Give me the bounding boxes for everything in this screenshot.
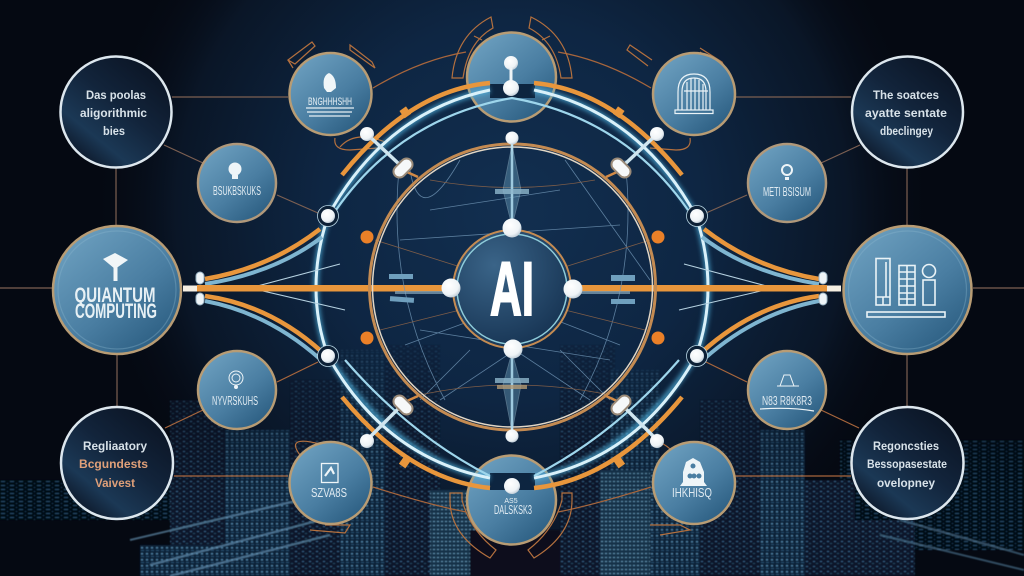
capsules: [391, 156, 633, 417]
fan end pills: [196, 272, 827, 305]
panel: node upper left small: BSUKBSKUKS: [213, 183, 261, 198]
panel: responsible callout: Bessopasestate: [867, 459, 947, 471]
icon: mortarboard: [103, 253, 128, 281]
icon: concentric target: [229, 371, 243, 388]
panel: node bottom left: [290, 442, 372, 524]
icon: framed picture: [322, 464, 338, 482]
panel: node upper right small: METI BSISUM: [763, 184, 811, 199]
panel: node bottom right: IHKHISQ: [672, 485, 712, 500]
icon: server robot: [680, 458, 707, 486]
panel: regulatory callout: Bcgundests: [79, 459, 148, 471]
ornaments around upper circles: [288, 17, 725, 558]
icon: pin: [504, 56, 518, 84]
inner blue arcs: [336, 98, 688, 476]
city skyline: [0, 345, 1024, 576]
panel: node top right: [653, 53, 735, 135]
inner ring: [370, 144, 656, 430]
network lines inside inner ring: [375, 160, 650, 400]
panel: quantum computing: QUIANTUM: [74, 284, 156, 307]
left fan: [183, 229, 455, 359]
panel: responsible callout: [852, 407, 964, 519]
panel: node bottom centre: AS5: [504, 498, 518, 505]
icon: buildings: [867, 258, 945, 317]
AI core: [453, 230, 571, 348]
panel: node top left: BNGHHHSHH: [308, 96, 352, 108]
arc clips: [399, 106, 625, 468]
icon: triangle: [777, 375, 799, 386]
panel: node top centre: [467, 32, 556, 122]
panel: sources callout: dbeclingey: [880, 126, 934, 138]
panel: quantum computing: [53, 226, 181, 354]
AI core: AI: [490, 247, 534, 332]
panel: sources callout: The soatces: [873, 90, 939, 102]
panel: node lower left small: NYVRSKUHS: [212, 393, 258, 408]
panel: node lower right small: N83 R8K8R3: [762, 393, 812, 408]
panel: regulatory callout: Vaivest: [95, 478, 135, 490]
connector lines: [0, 52, 1024, 512]
right fan: [569, 229, 841, 359]
nodes: [318, 80, 708, 494]
panel: node bottom centre: DALSKSK3: [494, 502, 532, 517]
panel: responsible callout: Regoncsties: [873, 441, 939, 453]
panel: node upper right small: [748, 144, 826, 222]
panel: regulatory callout: Regliaatory: [83, 441, 148, 453]
panel: node bottom right: [653, 442, 735, 524]
panel: regulatory callout: [61, 407, 173, 519]
orange dots: [360, 230, 664, 344]
panel: node bottom centre: [467, 456, 556, 544]
panel: sources callout: [852, 56, 963, 168]
panel: infrastructure: [844, 226, 972, 354]
panel: data pools callout: aligorithmic: [80, 108, 148, 120]
icon: arched window: [675, 74, 713, 114]
panel: node lower right small: [748, 351, 826, 429]
panel: node top left: [290, 53, 372, 135]
panel: node upper left small: [198, 144, 276, 222]
icon: ring: [782, 165, 792, 180]
ring glow: [316, 90, 708, 478]
bright ring arcs: [316, 90, 708, 478]
panel: data pools callout: bies: [103, 126, 125, 138]
panel: responsible callout: ovelopney: [877, 478, 936, 490]
icon: bulb: [228, 162, 242, 179]
panel: data pools callout: Das poolas: [86, 90, 146, 102]
outer ring: [316, 83, 708, 490]
panel: sources callout: ayatte sentate: [865, 108, 947, 120]
spindles: [389, 140, 635, 434]
orange arcs: [342, 83, 682, 488]
panel: quantum computing: COMPUTING: [75, 300, 157, 323]
panel: node lower left small: [198, 351, 276, 429]
dark gaps at poles: [490, 84, 535, 490]
panel: data pools callout: [60, 56, 172, 168]
panel: node bottom left: SZVA8S: [311, 485, 347, 500]
diagonal links: [369, 136, 655, 438]
icon: pavilion: [324, 73, 336, 92]
